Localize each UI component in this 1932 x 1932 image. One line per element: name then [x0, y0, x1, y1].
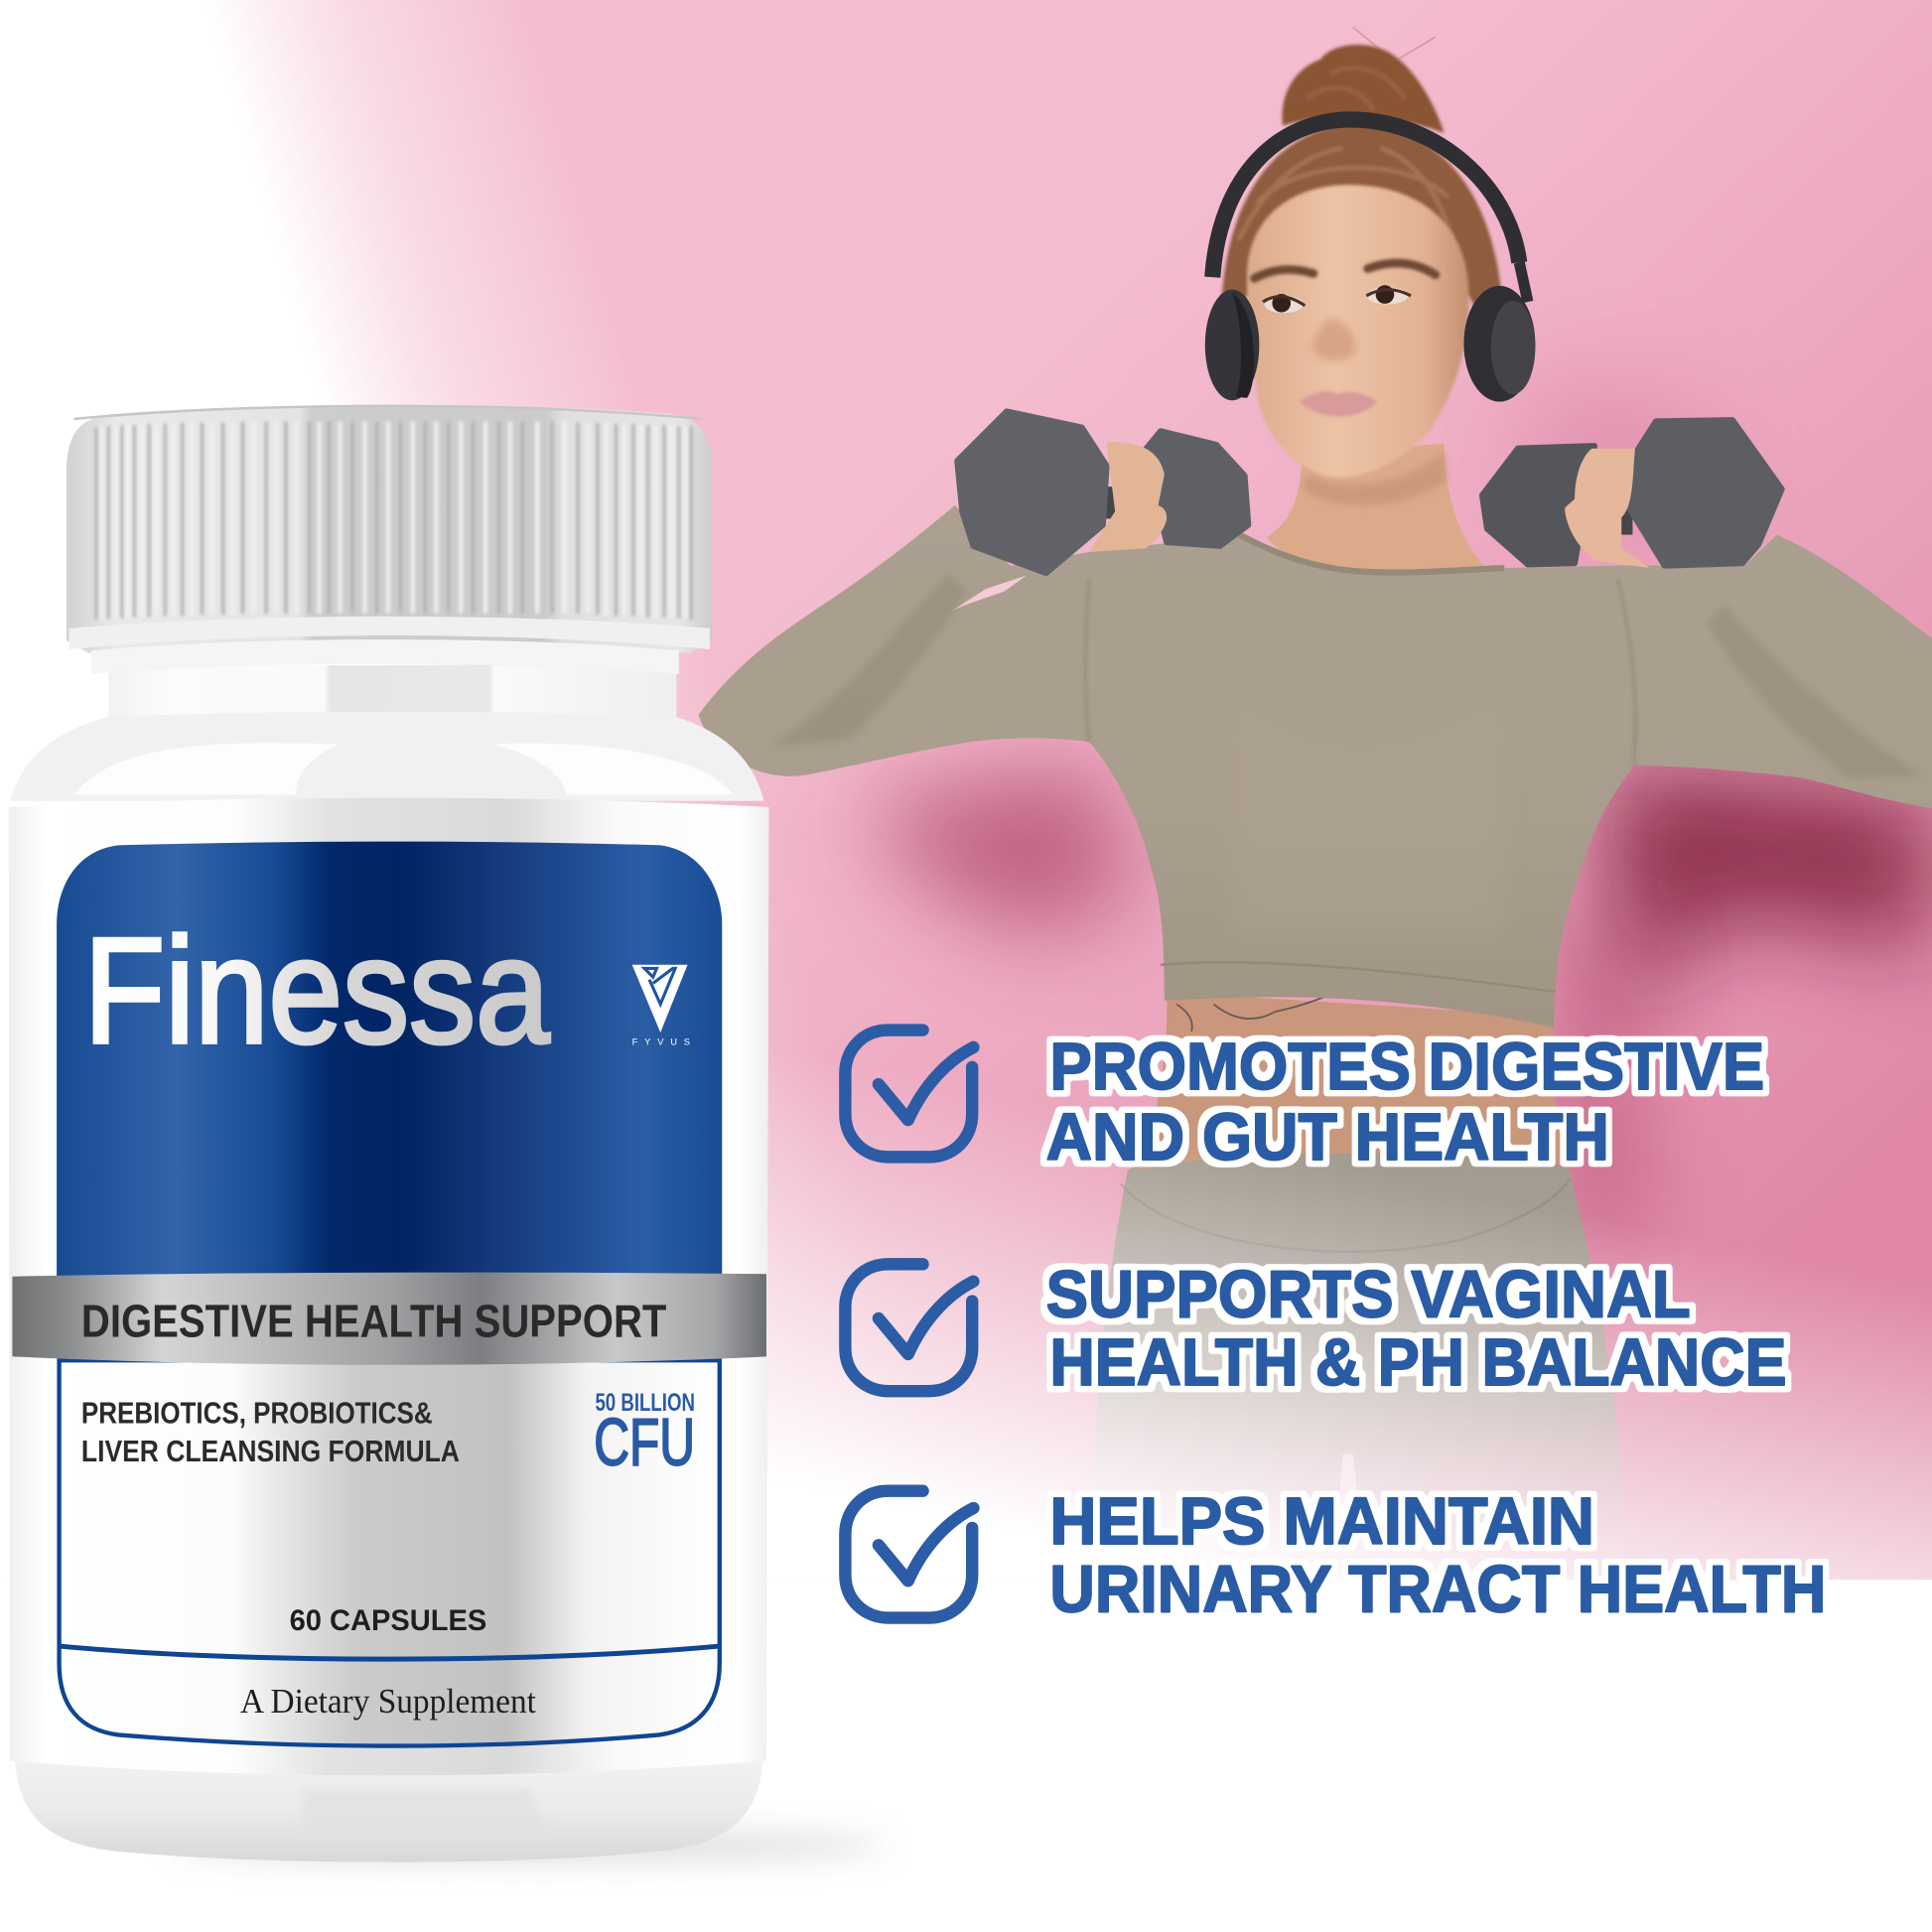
neck: [1267, 444, 1484, 573]
benefit text 3: HELPS MAINTAIN: [1049, 1484, 1594, 1559]
face: [1247, 185, 1469, 478]
bottle body: [9, 798, 768, 1775]
eyebrows: [1254, 263, 1436, 278]
grey band: [12, 1273, 766, 1365]
white fade over lower photo: [0, 740, 1932, 1580]
check icon 1: [845, 1031, 973, 1157]
formula line 2: LIVER CLEANSING FORMULA: [81, 1435, 460, 1468]
hair on head: [1221, 123, 1503, 369]
neck ring: [91, 639, 679, 674]
benefit text 2 second line: HEALTH & PH BALANCE: [1049, 1325, 1787, 1400]
band heading: DIGESTIVE HEALTH SUPPORT: [81, 1296, 666, 1347]
check icon 3: [845, 1491, 973, 1618]
cap: [67, 405, 712, 653]
label divider: [60, 1646, 720, 1659]
sweater: [699, 505, 1932, 1028]
supplement bottle: [9, 405, 888, 1863]
blue label panel: [57, 842, 722, 1282]
dietary supplement: A Dietary Supplement: [240, 1682, 536, 1721]
benefit text 1: PROMOTES DIGESTIVE: [1049, 1030, 1764, 1104]
right dumbbell: [1482, 420, 1782, 568]
eyes: [1263, 285, 1411, 313]
bottle base: [15, 1756, 762, 1863]
CFU: CFU: [594, 1406, 695, 1480]
leggings: [1089, 1152, 1627, 1580]
waistband seam: [1121, 1179, 1570, 1252]
woman with dumbbells: [699, 27, 1932, 1580]
formula line 1: PREBIOTICS, PROBIOTICS&: [81, 1396, 433, 1430]
ground shadow: [173, 1829, 888, 1863]
hair bun: [1282, 27, 1445, 133]
bottle neck: [108, 665, 676, 727]
left dumbbell: [957, 412, 1248, 573]
cast shadows on the wall: [863, 369, 1932, 1244]
white label panel: [60, 1360, 720, 1746]
bottle shoulder: [10, 712, 763, 801]
headphones: [1205, 119, 1535, 402]
check icon 2: [845, 1264, 973, 1391]
brand logo: FYVUS: [632, 1036, 690, 1046]
brand logo: [632, 965, 690, 1046]
nose: [1311, 318, 1356, 361]
benefit text 1 second line: AND GUT HEALTH: [1046, 1100, 1609, 1174]
capsule count: 60 CAPSULES: [290, 1604, 486, 1637]
benefit text 3 second line: URINARY TRACT HEALTH: [1049, 1552, 1826, 1626]
brand name: Finessa: [83, 907, 550, 1075]
benefit text 2: SUPPORTS VAGINAL: [1046, 1258, 1691, 1332]
midriff with tattoo: [1140, 992, 1568, 1171]
50 billion: 50 BILLION: [595, 1390, 695, 1417]
lips: [1299, 391, 1378, 417]
